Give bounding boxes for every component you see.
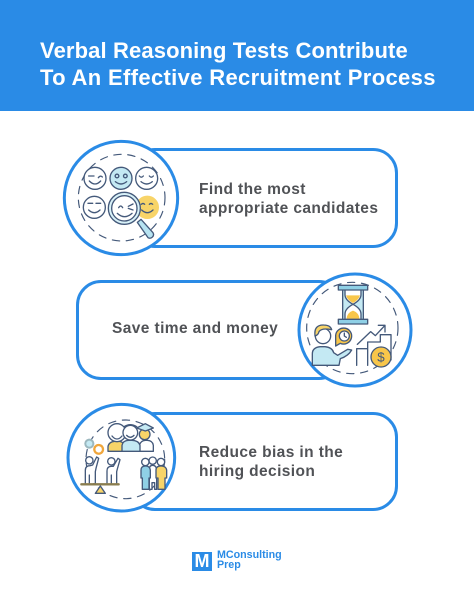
header banner <box>0 0 474 111</box>
logo <box>192 549 282 571</box>
card 1 text: Find the most <box>199 181 306 198</box>
card 1 text: appropriate candidates <box>199 200 378 217</box>
card 1 text <box>199 181 378 217</box>
card 2 text: Save time and money <box>112 320 278 337</box>
card 3 text: hiring decision <box>199 463 315 480</box>
icon: hourglass, person and money: $ <box>377 350 385 365</box>
logo text: Prep <box>217 559 241 571</box>
card 3 text <box>199 444 343 480</box>
logo mark: M <box>194 551 210 571</box>
card 2 <box>76 280 344 380</box>
card 3 <box>130 412 398 511</box>
logo text: MConsulting <box>217 549 282 561</box>
title <box>40 38 436 90</box>
title: Verbal Reasoning Tests Contribute <box>40 38 408 63</box>
card 1 <box>130 148 398 248</box>
logo text <box>217 549 282 571</box>
card 3 text: Reduce bias in the <box>199 444 343 461</box>
title: To An Effective Recruitment Process <box>40 65 436 90</box>
